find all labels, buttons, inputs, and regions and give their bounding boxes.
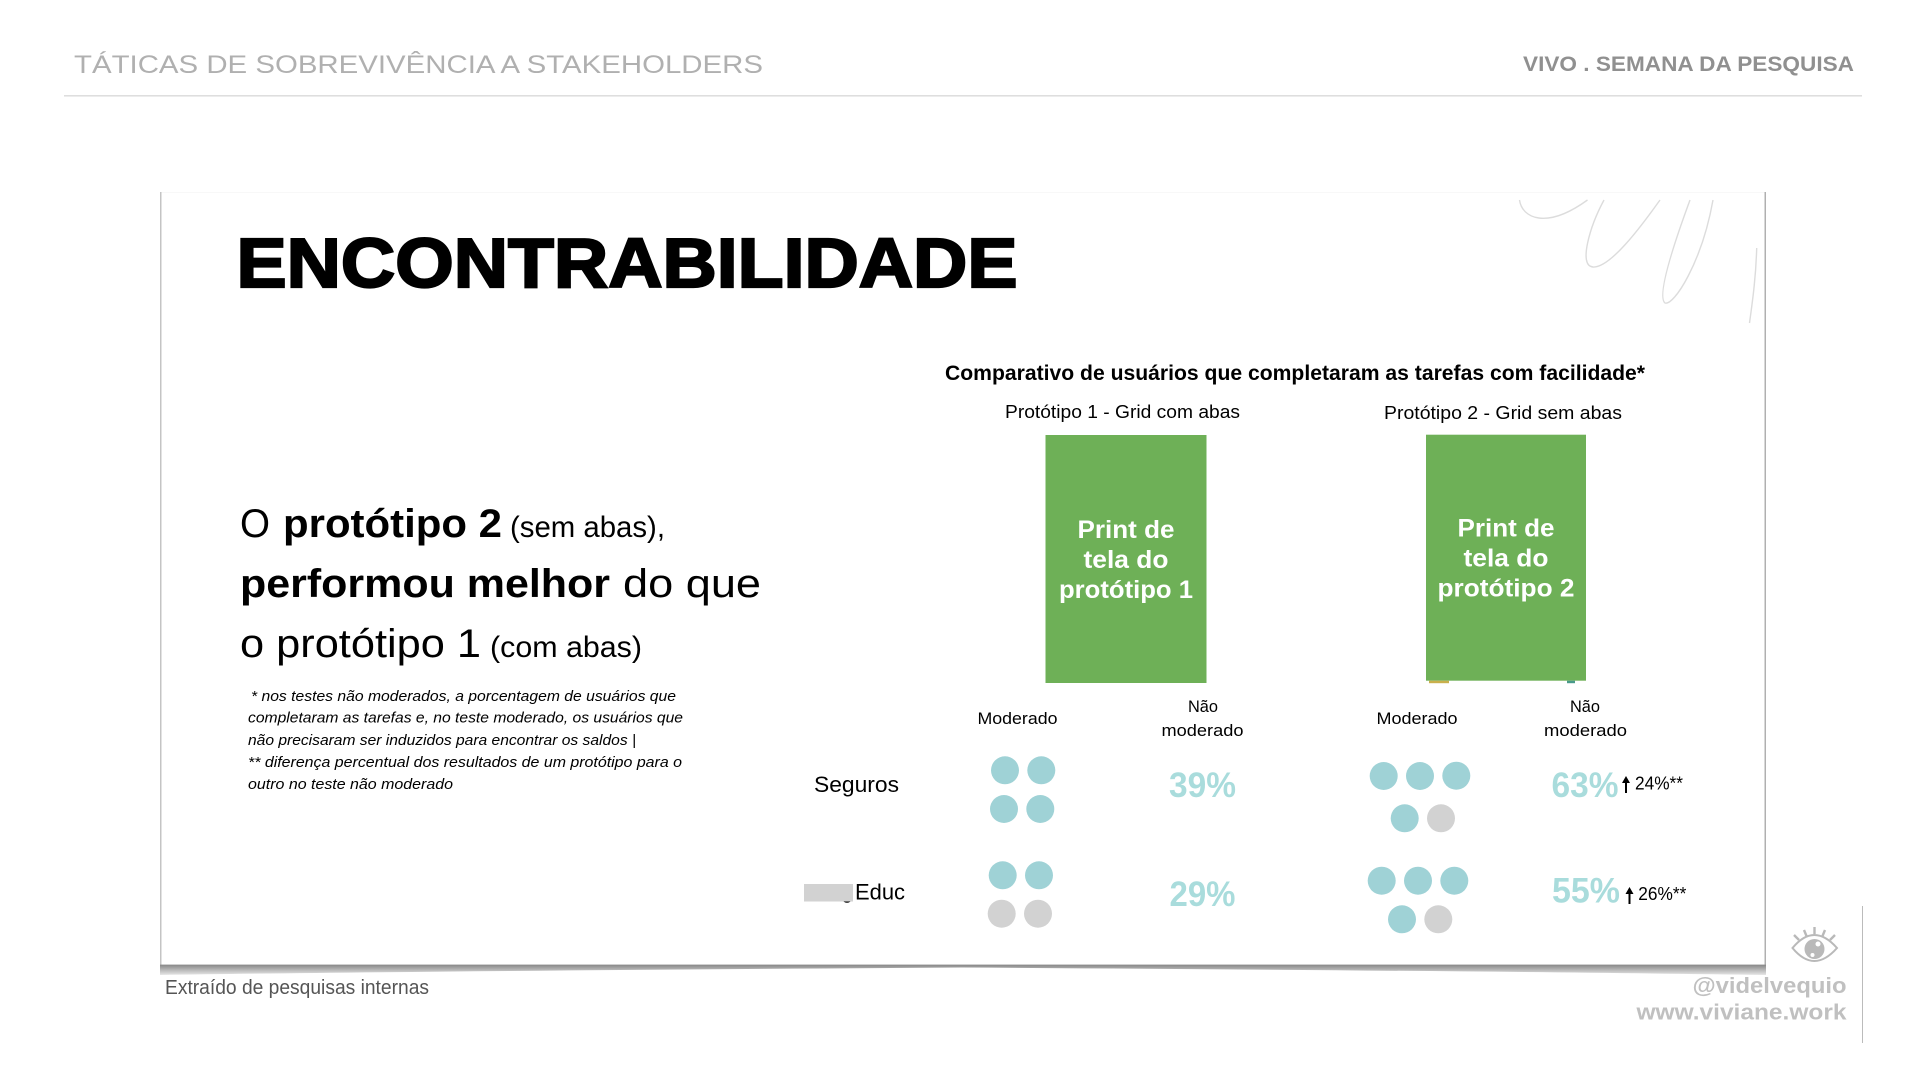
decoration: hand-drawn doodle xyxy=(1520,200,1757,323)
row label: Educ with redaction: Educ xyxy=(855,880,905,904)
text block: main conclusion: O xyxy=(240,502,270,546)
text block: main conclusion xyxy=(240,502,761,666)
credit: handle and site xyxy=(1635,973,1847,1024)
screenshot placeholder: prototype 1 xyxy=(1046,435,1206,683)
header event name: VIVO . SEMANA DA PESQUISA xyxy=(1523,53,1854,76)
text block: main conclusion: o protótipo 1 xyxy=(240,622,481,666)
icon: eye logo xyxy=(1792,927,1837,961)
arrow: up 24% xyxy=(1622,776,1630,793)
row label: Educ with redaction xyxy=(804,880,905,904)
column labels: moderated / unmoderated: moderado xyxy=(1544,721,1627,740)
dots: Seguros prototype 1 moderated xyxy=(990,756,1055,823)
dots: Educ prototype 2 moderated xyxy=(1368,867,1468,933)
text block: main conclusion: (com abas) xyxy=(490,631,642,664)
column heading: prototype 1: Protótipo 1 - Grid com abas xyxy=(1005,402,1240,422)
text block: main conclusion: do que xyxy=(623,562,761,606)
stat: 63%: 63% xyxy=(1552,766,1618,805)
text block: footnotes: não precisaram ser induzidos para encontrar os saldos | xyxy=(248,732,636,749)
credit: handle and site: www.viviane.work xyxy=(1635,1000,1847,1024)
screenshot placeholder: prototype 2: protótipo 2 xyxy=(1438,575,1574,603)
credit: handle and site: @videlvequio xyxy=(1692,973,1846,998)
text block: footnotes: outro no teste não moderado xyxy=(248,776,453,793)
row label: Seguros: Seguros xyxy=(814,772,899,797)
text block: footnotes xyxy=(248,688,683,793)
text block: main conclusion: (sem abas), xyxy=(510,511,665,544)
column labels: moderated / unmoderated: Moderado xyxy=(978,709,1058,728)
screenshot placeholder: prototype 1: Print de xyxy=(1078,516,1175,544)
column labels: moderated / unmoderated: Não xyxy=(1570,697,1600,716)
panel: slide card xyxy=(160,192,1766,975)
screenshot placeholder: prototype 2 xyxy=(1426,435,1586,683)
chart heading: Comparativo de usuários que completaram as tarefas com facilidade* xyxy=(945,362,1646,385)
delta: 24%: 24%** xyxy=(1635,774,1683,794)
arrow: up 26% xyxy=(1626,887,1634,904)
header title: TÁTICAS DE SOBREVIVÊNCIA A STAKEHOLDERS xyxy=(74,50,763,79)
column labels: moderated / unmoderated xyxy=(978,697,1627,740)
dots: Educ prototype 1 moderated xyxy=(988,861,1053,928)
title: ENCONTRABILIDADE xyxy=(236,224,1018,302)
dots: Seguros prototype 2 moderated xyxy=(1370,762,1470,832)
delta: 26%: 26%** xyxy=(1638,884,1686,904)
screenshot placeholder: prototype 2: tela do xyxy=(1464,545,1548,573)
screenshot placeholder: prototype 1: protótipo 1 xyxy=(1059,576,1193,604)
column labels: moderated / unmoderated: moderado xyxy=(1162,721,1244,740)
screenshot placeholder: prototype 1: tela do xyxy=(1084,546,1168,574)
stat: 55%: 55% xyxy=(1552,872,1620,910)
stat: 29%: 29% xyxy=(1170,875,1236,914)
screenshot placeholder: prototype 2: Print de xyxy=(1458,515,1555,543)
source note: Extraído de pesquisas internas xyxy=(165,977,429,999)
text block: footnotes: ** diferença percentual dos resultados de um protótipo para o xyxy=(248,754,682,771)
text block: main conclusion: performou melhor xyxy=(240,562,610,606)
text block: footnotes: completaram as tarefas e, no teste moderado, os usuários que xyxy=(248,710,683,726)
column labels: moderated / unmoderated: Não xyxy=(1188,697,1218,716)
header: slide top bar xyxy=(64,50,1862,97)
text block: footnotes: * nos testes não moderados, a porcentagem de usuários que xyxy=(251,688,676,705)
stat: 39%: 39% xyxy=(1169,766,1236,805)
column labels: moderated / unmoderated: Moderado xyxy=(1376,709,1458,728)
column heading: prototype 2: Protótipo 2 - Grid sem abas xyxy=(1384,403,1622,423)
text block: main conclusion: protótipo 2 xyxy=(283,502,502,546)
